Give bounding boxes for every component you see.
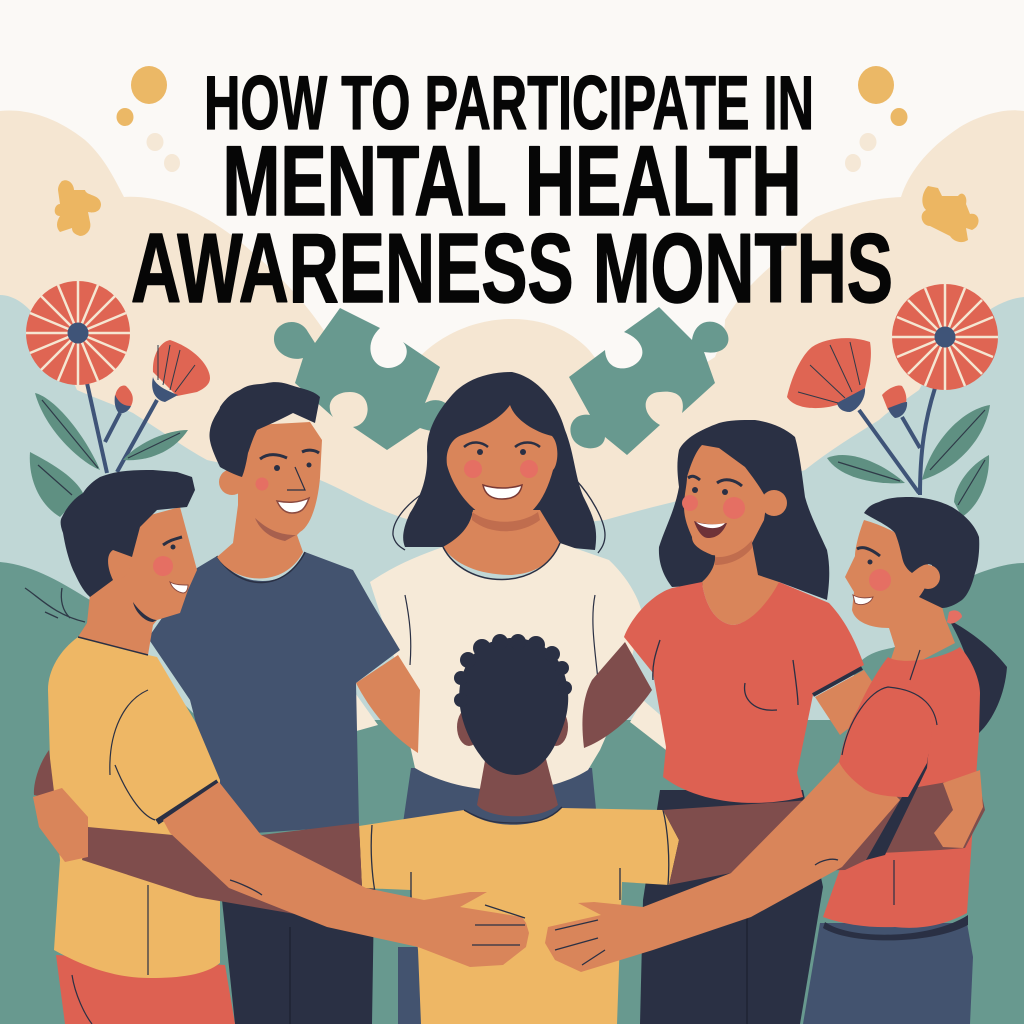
person: center woman [353,372,666,830]
icon: large teal puzzle right [569,307,728,455]
icon: small yellow puzzle right [922,186,979,242]
flowers left [26,281,210,517]
arms: brown arms around shoulders [34,750,985,920]
arm and hands: left man reaching forward [33,782,529,967]
icon: large teal puzzle left [274,308,451,450]
flowers right [787,284,998,517]
person: man in navy shirt [148,382,400,1024]
person: far right woman [803,497,1007,1024]
far right woman sleeve [839,680,937,860]
decorative dots left [116,66,180,172]
decorative dots right [845,66,908,172]
title: MENTAL HEALTH [222,125,802,236]
arm and hands: far right woman reaching forward [545,760,983,972]
icon: small yellow puzzle left [55,180,101,236]
person: woman on right in red shirt [624,420,885,1024]
person: back child in yellow shirt [359,634,679,1024]
title [131,61,893,323]
person: left man in yellow shirt [48,470,235,1024]
